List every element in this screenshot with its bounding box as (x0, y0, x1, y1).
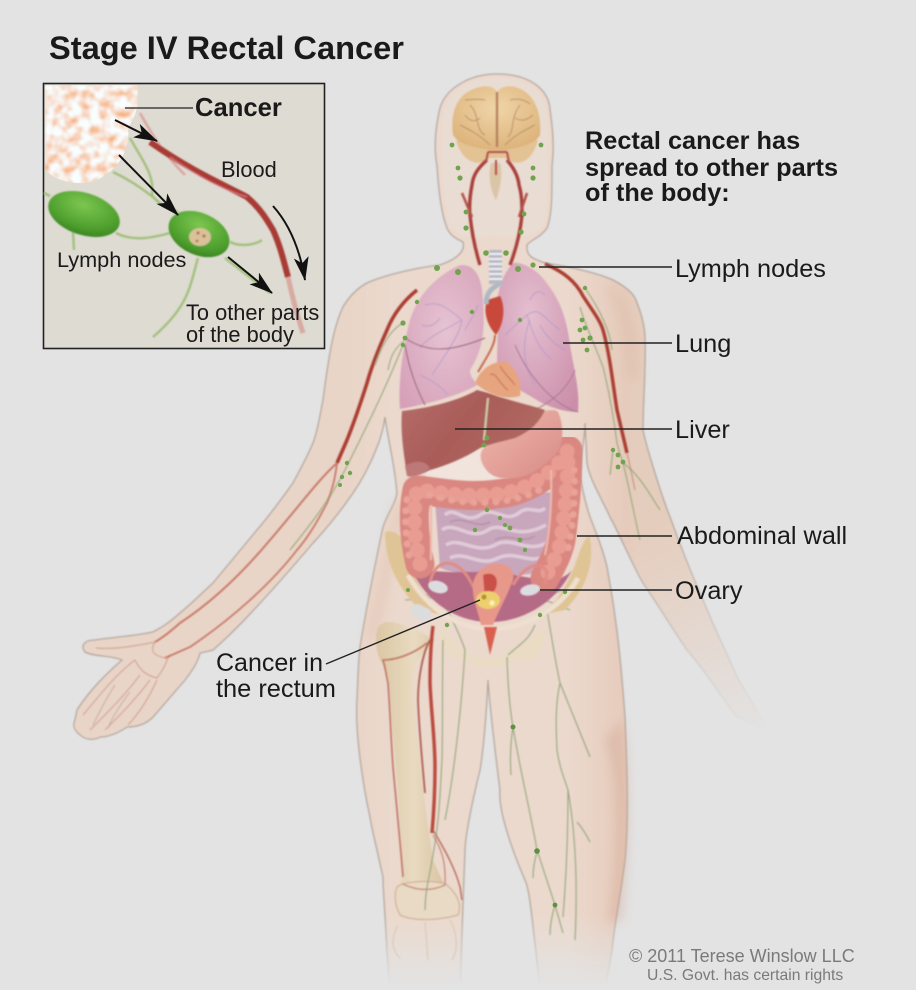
label: lung: Lung (675, 330, 731, 358)
inset panel: how cancer spreads (42, 84, 324, 348)
heading: spread statement: of the body: (585, 179, 730, 207)
human body illustration (74, 74, 767, 990)
leg lymph vessels (425, 605, 590, 940)
organ: right-side lung (497, 263, 578, 415)
tumor: cancer in the rectum (476, 591, 500, 609)
label: abdominal wall: Abdominal wall (677, 522, 847, 550)
arm arteries (155, 264, 635, 658)
organ: heart (475, 282, 520, 397)
copyright: U.S. Govt. has certain rights (647, 967, 843, 984)
label: cancer in the rectum: Cancer in (216, 649, 323, 677)
title: Stage IV Rectal Cancer (49, 29, 404, 66)
heading: spread statement (585, 127, 838, 207)
brain (452, 86, 540, 200)
copyright (629, 946, 855, 984)
heading: spread statement: Rectal cancer has (585, 127, 800, 155)
heading: spread statement: spread to other parts (585, 154, 838, 182)
lymph nodes on legs (510, 724, 557, 907)
organ labels: the rectum (216, 675, 336, 703)
lymph node with cancer cells (161, 202, 237, 266)
hand details (83, 642, 170, 730)
pelvis bones (385, 531, 591, 668)
leader lines (326, 267, 672, 664)
head translucent highlight (442, 78, 548, 237)
label: ovary: Ovary (675, 577, 743, 605)
label: lymph nodes inset: Lymph nodes (57, 247, 187, 272)
label: lymph nodes: Lymph nodes (675, 255, 826, 283)
leg arteries (383, 626, 462, 900)
inset background (44, 84, 324, 348)
label: to other parts (186, 300, 319, 347)
organ labels (216, 255, 847, 703)
lymph vessels (290, 288, 660, 612)
inner torso shading (372, 504, 400, 634)
body silhouette (74, 74, 767, 990)
tumor mass (45, 85, 138, 183)
copyright: © 2011 Terese Winslow LLC (629, 946, 855, 966)
shoulder shading (634, 354, 635, 371)
organ: left-side lung (399, 265, 485, 409)
organ: ovaries (427, 579, 541, 597)
organ: colon (406, 450, 575, 578)
trachea (489, 250, 502, 284)
organ: stomach (481, 410, 562, 479)
organ: small intestine (435, 492, 552, 576)
organ: liver (402, 390, 545, 477)
lymph vessels in inset (44, 138, 270, 337)
organ: pale cavity behind stomach (425, 445, 555, 500)
femur bone (376, 622, 460, 960)
lymph node left (42, 183, 126, 245)
blood vessel (140, 113, 303, 333)
head and neck arteries (462, 152, 527, 265)
label: to other parts: To other parts (186, 300, 319, 325)
organ: uterus and fallopian tubes (430, 563, 547, 655)
arrows in inset (115, 120, 305, 293)
organ: pelvic cavity (408, 570, 578, 629)
lymph nodes scattered (338, 143, 625, 627)
label: cancer: Cancer (195, 94, 282, 122)
shading on thigh (604, 720, 628, 925)
label: liver: Liver (675, 416, 730, 444)
label: to other parts: of the body (186, 322, 294, 347)
cancer leader (125, 107, 193, 109)
label: blood: Blood (221, 157, 277, 182)
